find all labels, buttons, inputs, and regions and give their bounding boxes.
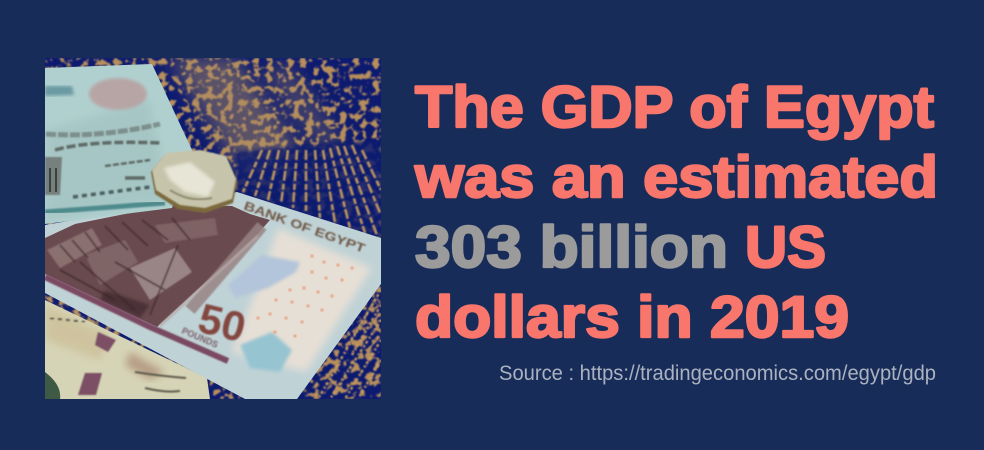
bank of egypt label: BANK OF EGYPT — [242, 199, 368, 256]
photo: Egyptian banknotes and coin — [45, 58, 381, 399]
purple note edge band — [45, 277, 228, 361]
headline — [414, 75, 938, 350]
watermark bird — [228, 255, 300, 298]
headline line 1: The GDP of Egypt — [415, 75, 934, 140]
orange security dots — [256, 254, 354, 338]
headline line 3: unit: US — [745, 215, 826, 280]
50 pounds banknote — [45, 192, 381, 399]
50 numeral: 50 — [194, 294, 251, 351]
headline line 4: dollars in 2019 — [415, 285, 849, 350]
headline line 2: was an estimated — [414, 145, 938, 210]
headline line 3: highlighted figure: 303 billion — [415, 215, 728, 280]
infographic canvas — [45, 58, 936, 399]
teal stripe — [45, 203, 165, 212]
monument engraving — [45, 157, 62, 195]
top banknote — [45, 64, 192, 224]
pink seal — [89, 78, 147, 110]
photo backdrop: navy and gold fabric — [45, 58, 381, 399]
bottom banknote — [45, 300, 210, 399]
coin — [151, 150, 237, 213]
script lines — [46, 124, 162, 197]
source note: Source : https://tradingeconomics.com/egypt/gdp — [499, 362, 936, 385]
engraved temple panel — [45, 205, 270, 327]
cream security panel — [232, 228, 372, 372]
teal ornament — [45, 86, 74, 96]
bottom teal emblem — [240, 332, 292, 372]
pounds label: POUNDS — [180, 326, 220, 350]
